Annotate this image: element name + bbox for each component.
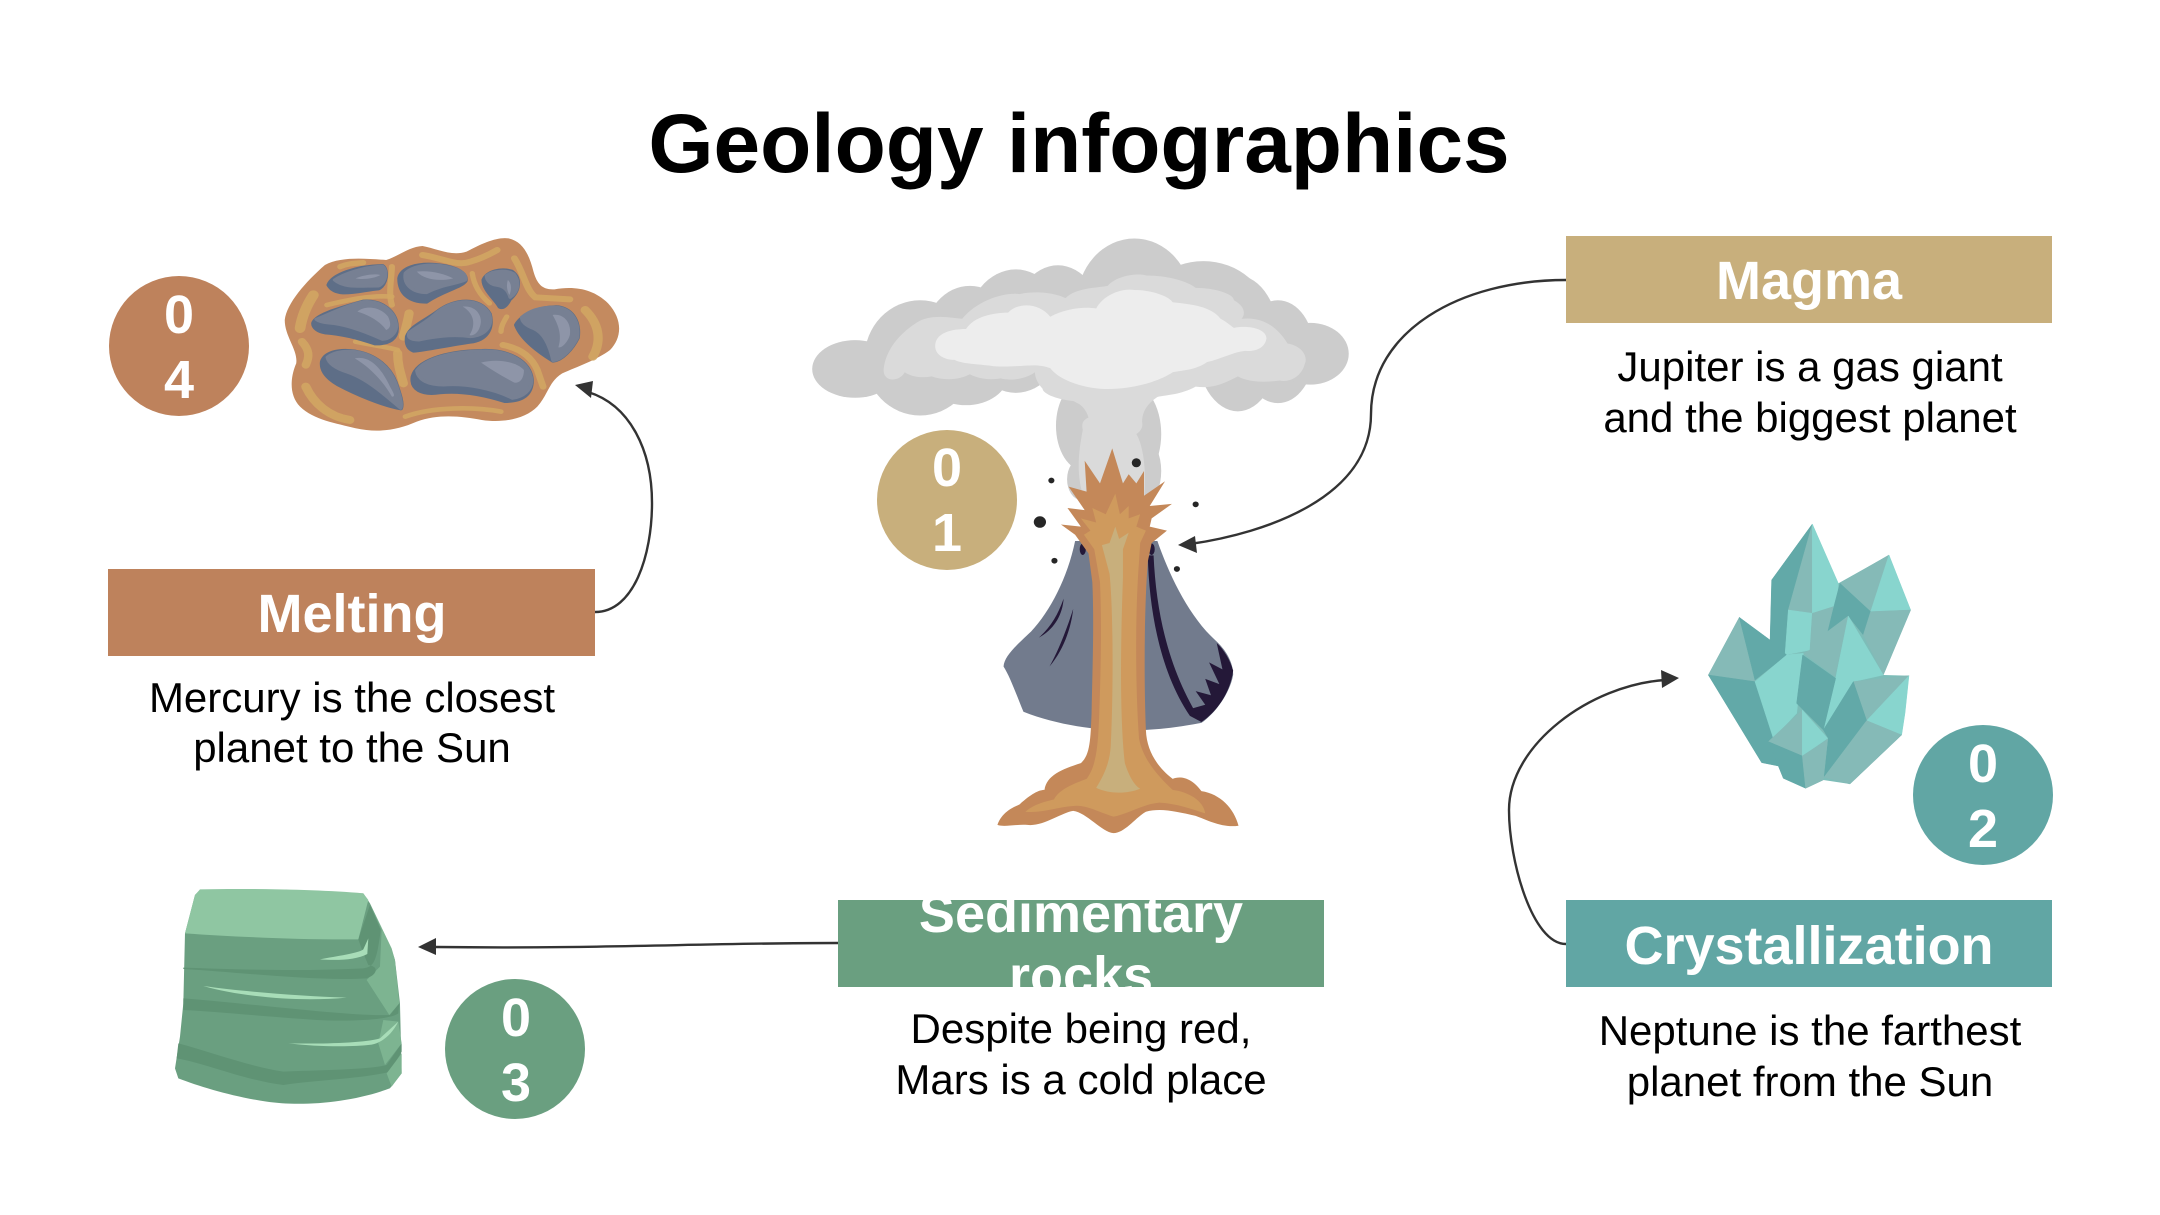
- badge 03: 3: [501, 1053, 531, 1113]
- badge 03: 0: [501, 988, 531, 1048]
- illustration: melting rock: [285, 238, 619, 431]
- panel: step 04 melting: [108, 238, 652, 771]
- badge 04: [109, 276, 249, 416]
- smoke cloud: [812, 239, 1349, 502]
- panel: step 03 sedimentary rocks: [175, 884, 1324, 1119]
- magma description: and the biggest planet: [1603, 394, 2017, 441]
- illustration: sedimentary rock: [175, 889, 402, 1104]
- arrow: sedimentary banner to rock: [418, 938, 838, 955]
- crystallization banner: Crystallization: [1624, 916, 1994, 976]
- badge 04: 0: [164, 285, 194, 345]
- crystallization banner: [1566, 900, 2052, 987]
- sedimentary rocks banner: [838, 884, 1324, 1006]
- magma banner: [1566, 236, 2052, 323]
- lava flow: [997, 448, 1239, 833]
- badge 03: [445, 979, 585, 1119]
- arrow: crystallization to crystals: [1509, 670, 1679, 944]
- melting banner: [108, 569, 595, 656]
- panel: step 01 magma: [877, 236, 2052, 570]
- badge 01: 0: [932, 438, 962, 498]
- illustration: crystals: [1708, 524, 1911, 788]
- badge 02: [1913, 725, 2053, 865]
- crystallization description: planet from the Sun: [1627, 1058, 1993, 1105]
- lava bombs: [1034, 458, 1199, 572]
- sedimentary rocks banner: Sedimentary: [919, 884, 1243, 944]
- sedimentary rocks banner: rocks: [1009, 946, 1153, 1006]
- melting description: Mercury is the closest: [149, 674, 555, 721]
- arrow: magma to volcano: [1178, 280, 1566, 553]
- title: Geology infographics: [648, 96, 1510, 190]
- melting description: planet to the Sun: [193, 724, 511, 771]
- panel: step 02 crystallization: [1509, 524, 2053, 1105]
- sedimentary rocks description: Mars is a cold place: [895, 1056, 1267, 1103]
- melting banner: Melting: [258, 584, 446, 644]
- illustration: volcano: [812, 239, 1349, 833]
- badge 02: 2: [1968, 799, 1998, 859]
- badge 01: 1: [932, 503, 962, 563]
- sedimentary rocks description: Despite being red,: [911, 1005, 1251, 1052]
- volcano cone: [1004, 541, 1233, 730]
- magma description: Jupiter is a gas giant: [1617, 343, 2003, 390]
- arrow: melting to rock: [575, 381, 652, 612]
- magma banner: Magma: [1716, 251, 1903, 311]
- badge 04: 4: [164, 350, 194, 410]
- badge 02: 0: [1968, 734, 1998, 794]
- crystallization description: Neptune is the farthest: [1599, 1007, 2022, 1054]
- badge 01: [877, 430, 1017, 570]
